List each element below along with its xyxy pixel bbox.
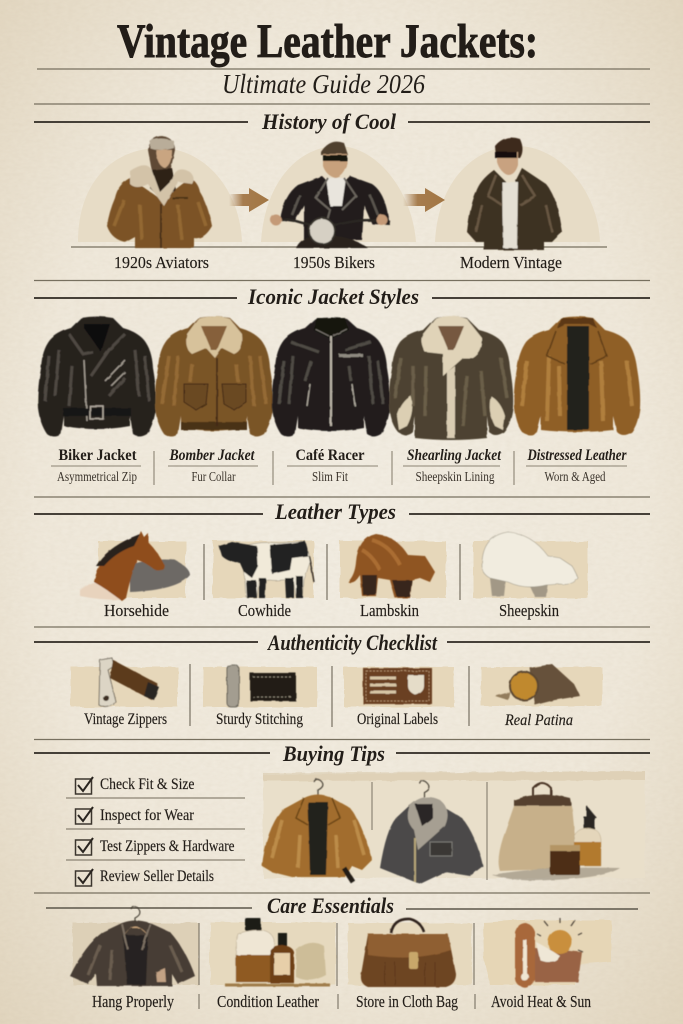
jacket: bomber	[155, 316, 273, 436]
label: cowhide: Cowhide	[238, 601, 291, 620]
caption: shearling jacket	[407, 447, 501, 484]
heading: History of Cool: History of Cool	[261, 109, 397, 134]
caption: distressed leather: Worn & Aged	[544, 469, 606, 484]
icon: patina	[495, 664, 580, 705]
heading: Leather Types: Leather Types	[274, 499, 396, 524]
tip: inspect for wear: Inspect for Wear	[100, 807, 195, 824]
label: original labels: Original Labels	[357, 711, 438, 728]
label: modern vintage: Modern Vintage	[460, 253, 562, 272]
icon: grey hooded jacket on hanger	[380, 781, 483, 884]
subtitle: Ultimate Guide 2026	[222, 69, 425, 99]
tip: check fit and size: Check Fit & Size	[100, 776, 194, 793]
caption: cafe racer: Café Racer	[296, 447, 364, 464]
icon: sheep	[482, 532, 578, 597]
label: sheepskin: Sheepskin	[499, 601, 559, 620]
caption: cafe racer	[296, 447, 364, 484]
panel: authenticity checklist	[71, 658, 602, 729]
panel: leather types	[80, 531, 588, 620]
figure: 1950s biker on motorcycle	[270, 142, 390, 248]
label: sturdy stitching: Sturdy Stitching	[216, 711, 303, 728]
heading: Iconic Jacket Styles: Iconic Jacket Styles	[247, 284, 419, 309]
label: 1920s aviators: 1920s Aviators	[114, 253, 209, 272]
icon: brown animal	[348, 534, 435, 598]
icon: label patch	[363, 668, 432, 704]
heading: Authenticity Checklist: Authenticity Checklist	[266, 630, 438, 655]
icon: stitching	[227, 665, 296, 707]
caption: distressed leather	[527, 447, 627, 484]
label: store in cloth bag: Store in Cloth Bag	[356, 992, 458, 1011]
arrow: aviators to bikers	[229, 188, 269, 212]
caption: distressed leather: Distressed Leather	[527, 447, 627, 464]
label: 1950s bikers: 1950s Bikers	[293, 253, 375, 272]
panel: buying tips checklist	[66, 776, 245, 886]
caption: bomber jacket: Bomber Jacket	[169, 447, 255, 464]
label: hang properly: Hang Properly	[92, 992, 174, 1011]
tip: check fit and size	[76, 776, 194, 794]
icon: heat and sun warning	[515, 918, 583, 988]
caption: biker jacket: Biker Jacket	[58, 447, 137, 464]
jacket: shearling	[389, 316, 513, 440]
caption: cafe racer: Slim Fit	[312, 469, 348, 484]
caption: shearling jacket: Sheepskin Lining	[416, 469, 495, 484]
label: vintage zippers: Vintage Zippers	[84, 711, 167, 728]
panel: jacket styles	[38, 316, 640, 485]
icon: horse	[80, 531, 190, 601]
label: condition leather: Condition Leather	[217, 992, 319, 1011]
label: real patina: Real Patina	[504, 712, 573, 729]
icon: cow	[219, 541, 314, 598]
caption: biker jacket: Asymmetrical Zip	[57, 469, 137, 484]
jacket: cafe racer	[272, 318, 390, 436]
jacket captions	[51, 447, 627, 485]
heading: Buying Tips: Buying Tips	[282, 741, 385, 766]
jacket: distressed leather	[514, 316, 640, 435]
icon: leather bag	[361, 919, 456, 987]
caption: bomber jacket: Fur Collar	[192, 469, 236, 484]
icon: cloth bag and care products	[492, 783, 620, 880]
label: lambskin: Lambskin	[360, 601, 419, 620]
tip: test zippers and hardware: Test Zippers & Hardware	[100, 838, 234, 855]
panel: history timeline	[78, 136, 600, 272]
title: Vintage Leather Jackets:	[117, 15, 538, 68]
panel: buying tips images	[262, 771, 645, 884]
figure: modern vintage man	[467, 138, 562, 250]
label: avoid heat and sun: Avoid Heat & Sun	[491, 992, 591, 1011]
tip: review seller details	[76, 868, 214, 886]
jacket: biker	[38, 316, 156, 436]
icon: jacket on hanger	[70, 906, 195, 986]
caption: bomber jacket	[169, 447, 255, 484]
figure: 1920s aviator	[107, 136, 212, 248]
caption: shearling jacket: Shearling Jacket	[407, 447, 501, 464]
panel: care essentials	[70, 906, 611, 1011]
caption: biker jacket	[57, 447, 137, 484]
arch backdrops	[78, 146, 600, 242]
icon: conditioner bottles and sponge	[225, 918, 330, 985]
icon: zipper	[99, 658, 159, 707]
tip: review seller details: Review Seller Details	[100, 868, 214, 885]
arrow: bikers to modern	[403, 188, 445, 212]
label: horsehide: Horsehide	[104, 601, 169, 620]
heading: Care Essentials: Care Essentials	[267, 893, 394, 918]
icon: tan jacket on hanger	[262, 779, 372, 882]
